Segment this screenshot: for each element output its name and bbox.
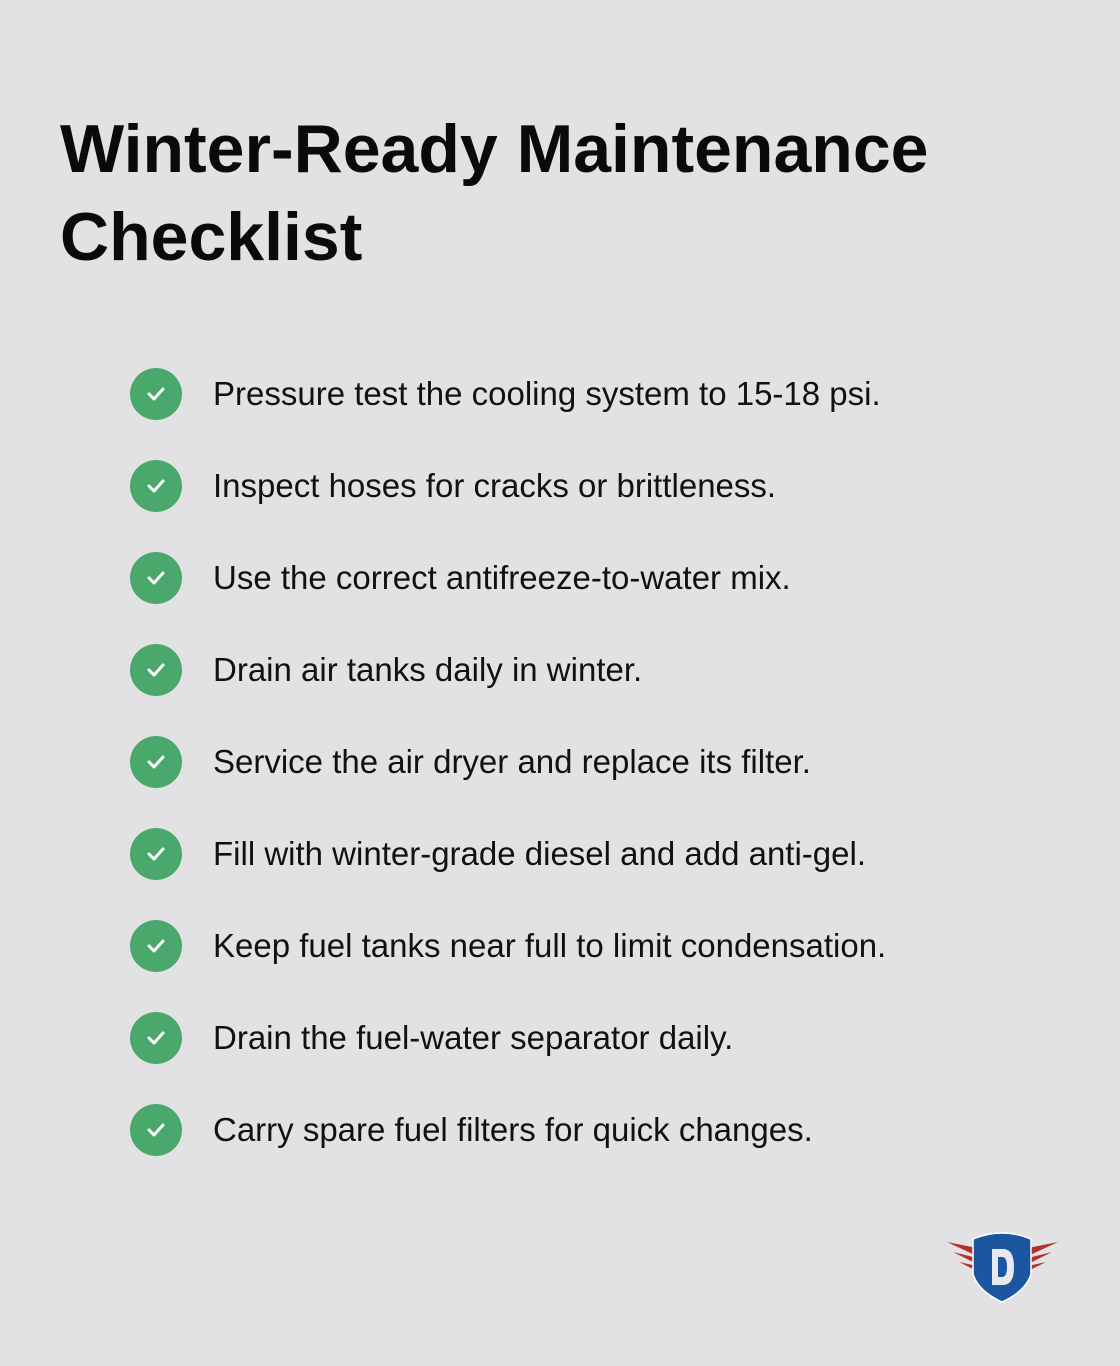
item 5 <box>130 736 811 788</box>
item 5: Service the air dryer and replace its filter. <box>213 743 811 780</box>
item 6: Fill with winter-grade diesel and add anti-gel. <box>213 835 866 872</box>
item 3 <box>130 552 791 604</box>
title <box>60 111 928 275</box>
item 7 <box>130 920 886 972</box>
item 4 <box>130 644 642 696</box>
item 1 <box>130 368 881 420</box>
item 9 <box>130 1104 813 1156</box>
item 9: Carry spare fuel filters for quick changes. <box>213 1111 813 1148</box>
item 3: Use the correct antifreeze-to-water mix. <box>213 559 791 596</box>
item 7: Keep fuel tanks near full to limit condensation. <box>213 927 886 964</box>
item 1: Pressure test the cooling system to 15-18 psi. <box>213 375 881 412</box>
title: Checklist <box>60 199 362 275</box>
item 8: Drain the fuel-water separator daily. <box>213 1019 733 1056</box>
item 2: Inspect hoses for cracks or brittleness. <box>213 467 776 504</box>
item 8 <box>130 1012 733 1064</box>
item 6 <box>130 828 866 880</box>
item 4: Drain air tanks daily in winter. <box>213 651 642 688</box>
item 2 <box>130 460 776 512</box>
title: Winter-Ready Maintenance <box>60 111 928 187</box>
logo <box>947 1232 1058 1303</box>
